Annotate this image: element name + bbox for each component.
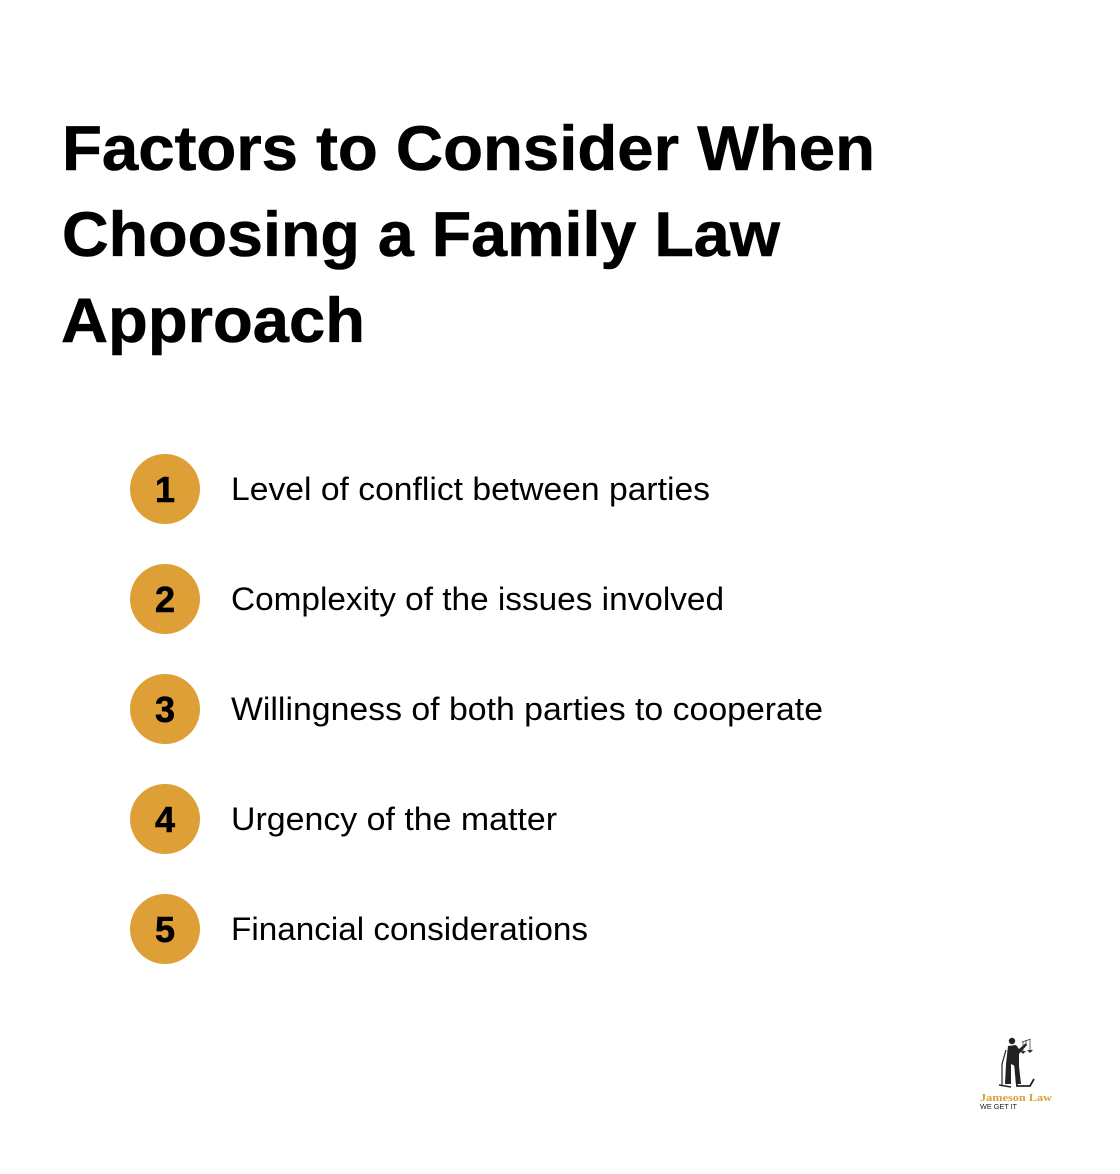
list item 5: financial [130, 894, 588, 964]
list item 3: willingness: 3 [155, 689, 175, 730]
logo tagline: WE GET IT [980, 1104, 1018, 1111]
list item 4: urgency [130, 784, 557, 854]
list item 5: financial: 5 [155, 909, 175, 950]
list item 1: level of conflict [130, 454, 710, 524]
icon: lady justice [999, 1038, 1034, 1087]
title: Approach [61, 286, 365, 356]
list item 3: willingness [130, 674, 823, 744]
title [61, 114, 875, 356]
list item 3: willingness: Willingness of both parties to cooperate [231, 691, 823, 727]
title: Choosing a Family Law [62, 200, 781, 270]
logo wordmark: Jameson Law [980, 1092, 1052, 1104]
logo: Jameson Law [980, 1038, 1052, 1111]
list item 2: complexity: 2 [155, 579, 175, 620]
title: Factors to Consider When [62, 114, 875, 184]
list item 1: level of conflict: Level of conflict between parties [231, 471, 710, 507]
list item 2: complexity [130, 564, 724, 634]
list item 1: level of conflict: 1 [155, 469, 175, 510]
list item 2: complexity: Complexity of the issues involved [231, 581, 724, 617]
list item 4: urgency: 4 [155, 799, 175, 840]
list item 5: financial: Financial considerations [231, 911, 588, 947]
list item 4: urgency: Urgency of the matter [231, 801, 557, 837]
